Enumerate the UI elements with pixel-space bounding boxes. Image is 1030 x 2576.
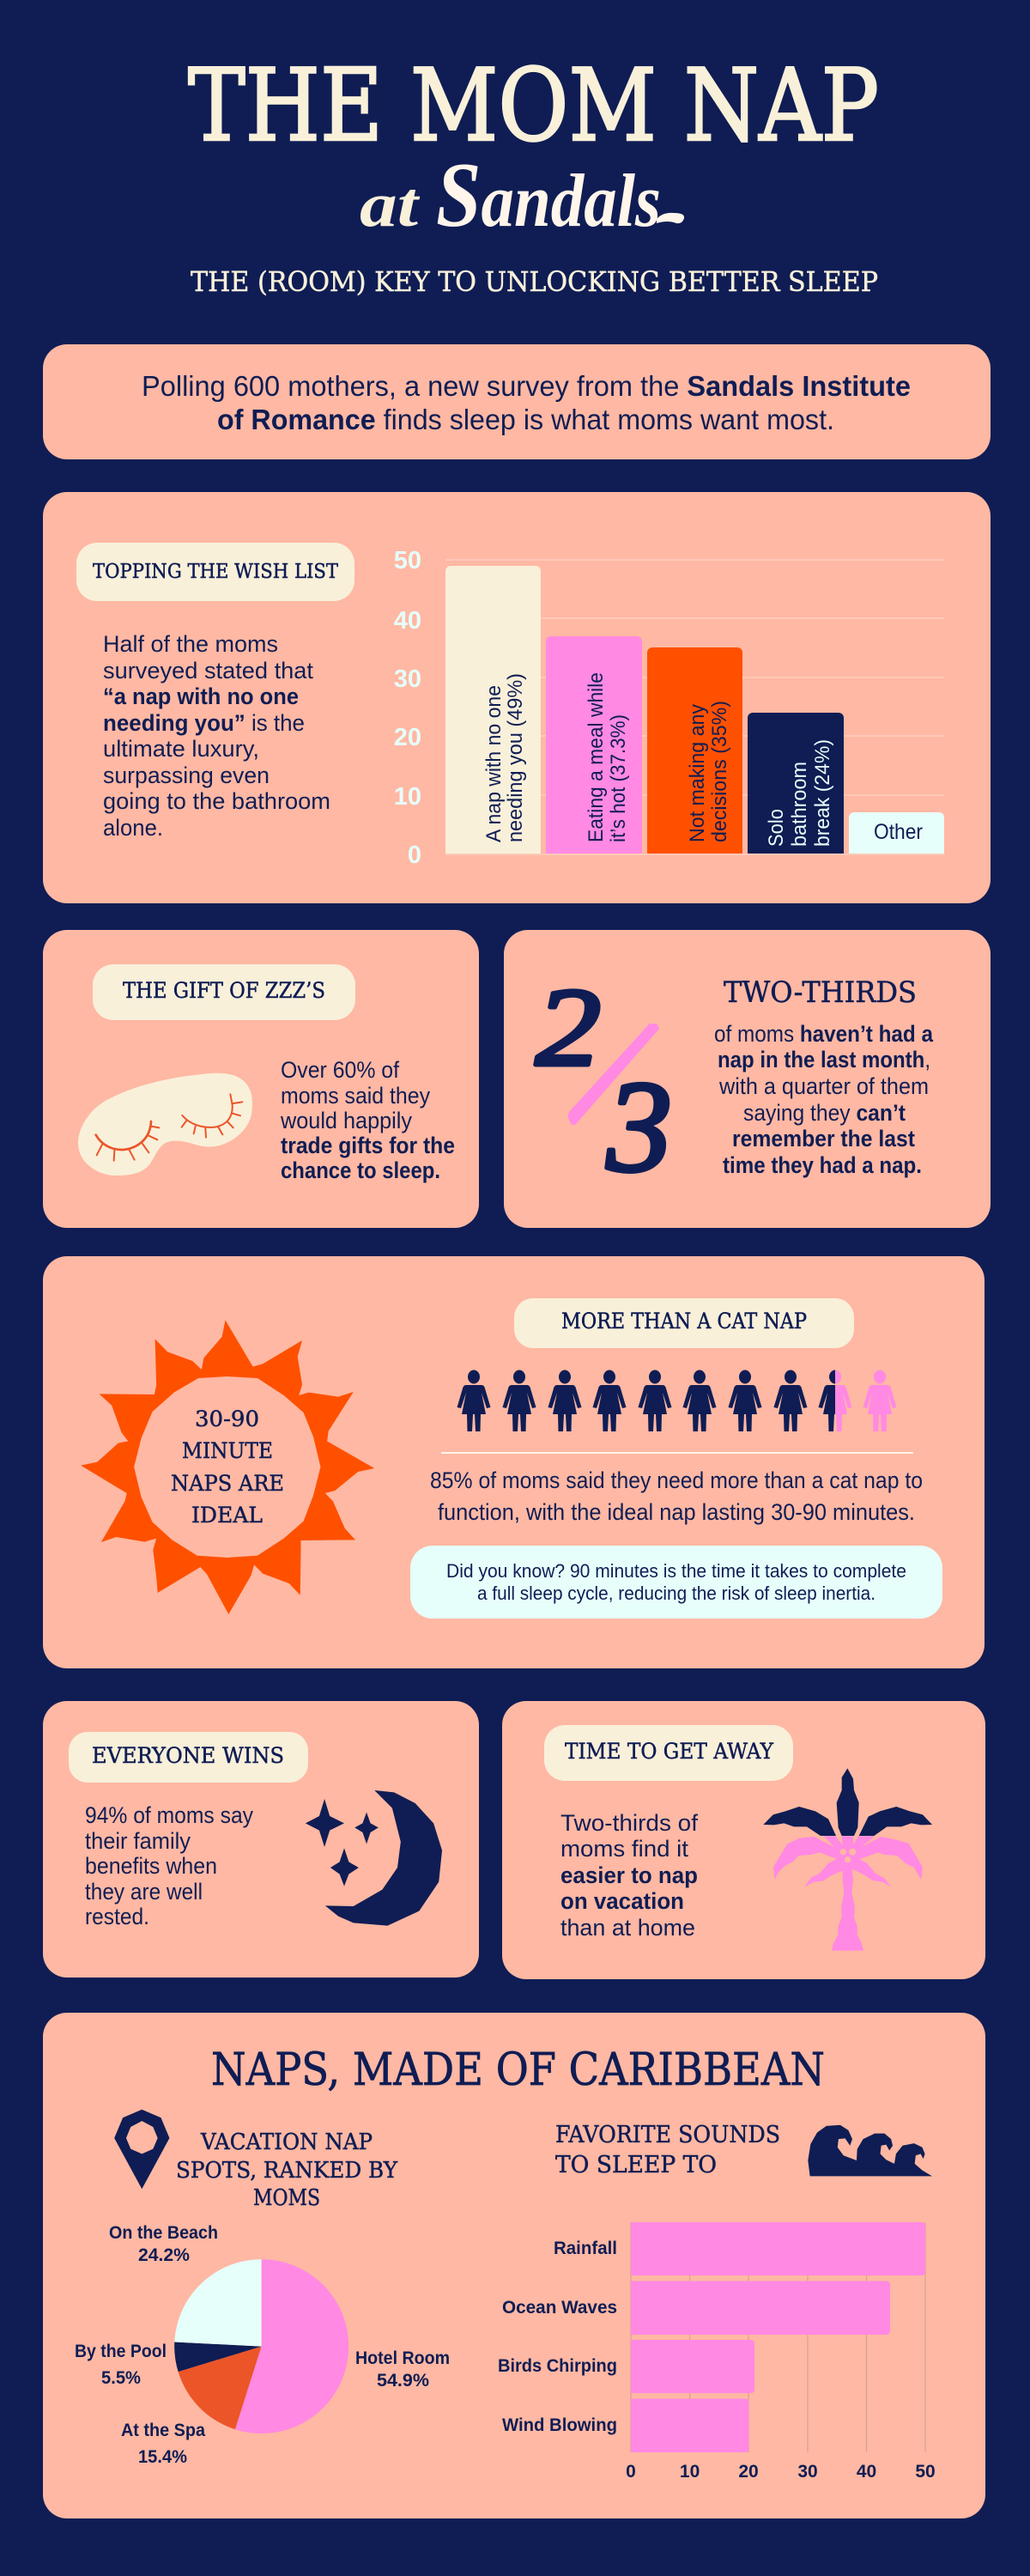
- pie chart: nap spots: By the Pool: [75, 2342, 167, 2361]
- everyone wins paragraph: benefits when: [85, 1853, 217, 1879]
- bar chart: wish list: 0: [408, 841, 421, 869]
- bar chart: favorite sounds: Ocean Waves: [502, 2298, 617, 2318]
- bar chart: favorite sounds: 20: [738, 2462, 759, 2482]
- pie chart: nap spots: On the Beach: [109, 2223, 218, 2243]
- two-thirds paragraph: with a quarter of them: [718, 1073, 929, 1099]
- title script: at Sandals: Sandals: [436, 144, 661, 246]
- intro text: of Romance finds sleep is what moms want most.: [217, 404, 834, 435]
- heading pill: the gift of zzz's: THE GIFT OF ZZZ’S: [123, 978, 325, 1003]
- subheading: favorite sounds: FAVORITE SOUNDS: [555, 2122, 780, 2148]
- two-thirds paragraph: saying they can’t: [743, 1100, 906, 1126]
- wish list paragraph: alone.: [103, 815, 163, 841]
- panel: the gift of zzz's: [43, 930, 479, 1228]
- bar chart: wish list: 50: [394, 547, 421, 574]
- heading: naps, made of caribbean: NAPS, MADE OF CARIBBEAN: [211, 2044, 825, 2096]
- icon: sun badge: [81, 1320, 374, 1614]
- gift paragraph: moms said they: [281, 1083, 430, 1109]
- pie chart: nap spots: 24.2%: [138, 2245, 190, 2265]
- bar chart: wish list: needing you (49%): [504, 673, 527, 842]
- panel: everyone wins: [43, 1701, 479, 1978]
- panel: more than a cat nap: [43, 1256, 985, 1668]
- wish list paragraph: going to the bathroom: [103, 788, 330, 814]
- heading pill: more than a cat nap: MORE THAN A CAT NAP: [561, 1309, 807, 1334]
- bar chart: wish list: 20: [394, 724, 421, 751]
- bar chart: wish list: it’s hot (37.3%): [607, 714, 630, 842]
- get away paragraph: easier to nap: [560, 1862, 698, 1888]
- heading pill: topping the wish list: TOPPING THE WISH LIST: [93, 561, 339, 583]
- subtitle: THE (ROOM) KEY TO UNLOCKING BETTER SLEEP: [191, 265, 878, 298]
- everyone wins paragraph: [85, 1802, 253, 1929]
- subheading: vacation nap spots: MOMS: [253, 2185, 320, 2211]
- callout: did you know: Did you know? 90 minutes is the time it takes to complete: [446, 1560, 906, 1582]
- bar chart: favorite sounds: [498, 2222, 936, 2482]
- pie chart: nap spots: 5.5%: [101, 2368, 141, 2388]
- icon: sun badge: 30-90: [195, 1406, 259, 1431]
- intro text: [142, 370, 911, 435]
- everyone wins paragraph: they are well: [85, 1879, 203, 1905]
- icon: moon and stars: [306, 1790, 442, 1926]
- title script: at Sandals: at: [360, 170, 421, 240]
- wish list paragraph: surveyed stated that: [103, 658, 313, 683]
- cat nap paragraph: function, with the ideal nap lasting 30-90 minutes.: [438, 1499, 915, 1525]
- two-thirds paragraph: of moms haven’t had a: [714, 1021, 934, 1047]
- title: THE MOM NAP: [188, 48, 879, 164]
- pie chart: nap spots: 15.4%: [138, 2447, 187, 2467]
- wish list paragraph: surpassing even: [103, 762, 270, 788]
- bar chart: wish list: Solo: [765, 809, 788, 847]
- panel: intro: [43, 344, 991, 459]
- icon: palm tree: [763, 1768, 932, 1951]
- get away paragraph: Two-thirds of: [560, 1810, 699, 1836]
- two-thirds paragraph: nap in the last month,: [718, 1047, 930, 1072]
- bar chart: wish list: break (24%): [811, 739, 834, 847]
- panel: time to get away: [502, 1701, 985, 1979]
- bar chart: favorite sounds: Birds Chirping: [498, 2356, 617, 2376]
- bar chart: favorite sounds: 30: [797, 2462, 818, 2482]
- subheading: vacation nap spots: SPOTS, RANKED BY: [176, 2158, 398, 2184]
- bar chart: wish list: Other: [874, 820, 923, 844]
- callout: did you know: [410, 1546, 942, 1619]
- two-thirds paragraph: [714, 1021, 934, 1178]
- bar chart: wish list: 10: [394, 783, 421, 811]
- bar chart: wish list: Not making any: [686, 704, 709, 842]
- bar chart: favorite sounds: Wind Blowing: [502, 2415, 617, 2435]
- pie chart: nap spots: 54.9%: [377, 2371, 429, 2391]
- fraction graphic: 2/3: [536, 966, 672, 1199]
- bar chart: wish list: [394, 547, 944, 869]
- cat nap paragraph: 85% of moms said they need more than a cat nap to: [430, 1467, 923, 1493]
- everyone wins paragraph: 94% of moms say: [85, 1802, 253, 1828]
- get away paragraph: on vacation: [560, 1888, 684, 1914]
- icon: sleep mask: [78, 1073, 252, 1176]
- panel: two-thirds: [504, 930, 991, 1228]
- subheading: favorite sounds: [555, 2122, 780, 2178]
- pictogram: 85 percent of moms: [457, 1370, 896, 1431]
- get away paragraph: than at home: [560, 1915, 695, 1941]
- bar chart: wish list: 40: [394, 607, 421, 635]
- fraction graphic: 2/3: 2: [536, 966, 601, 1090]
- get away paragraph: [560, 1810, 699, 1941]
- pie chart: nap spots: Hotel Room: [355, 2348, 450, 2368]
- gift paragraph: trade gifts for the: [281, 1133, 455, 1158]
- get away paragraph: moms find it: [560, 1836, 688, 1862]
- cat nap paragraph: [430, 1467, 923, 1525]
- wish list paragraph: Half of the moms: [103, 631, 278, 657]
- bar chart: wish list: decisions (35%): [708, 701, 731, 842]
- intro text: Polling 600 mothers, a new survey from the Sandals Institute: [142, 370, 911, 402]
- everyone wins paragraph: their family: [85, 1828, 191, 1854]
- heading pill: time to get away: [544, 1725, 793, 1781]
- icon: waves: [808, 2125, 932, 2176]
- wish list paragraph: “a nap with no one: [103, 683, 299, 709]
- bar chart: wish list: 30: [394, 665, 421, 693]
- pie chart: nap spots: [75, 2223, 450, 2467]
- wish list paragraph: [103, 631, 330, 841]
- bar chart: favorite sounds: 10: [680, 2462, 700, 2482]
- bar chart: wish list: Eating a meal while: [585, 672, 608, 842]
- heading pill: everyone wins: [69, 1732, 308, 1783]
- gift paragraph: chance to sleep.: [281, 1157, 440, 1183]
- bar chart: favorite sounds: 40: [857, 2462, 876, 2482]
- panel: topping the wish list: [43, 492, 991, 903]
- heading pill: everyone wins: EVERYONE WINS: [92, 1743, 284, 1768]
- bar chart: favorite sounds: 0: [626, 2462, 636, 2482]
- icon: sun badge: MINUTE: [182, 1438, 273, 1463]
- bar chart: favorite sounds: 50: [915, 2462, 936, 2482]
- subheading: vacation nap spots: [176, 2129, 398, 2211]
- heading pill: topping the wish list: [76, 543, 354, 601]
- gift paragraph: Over 60% of: [281, 1057, 399, 1083]
- bar chart: wish list: bathroom: [788, 762, 811, 847]
- callout: did you know: a full sleep cycle, reducing the risk of sleep inertia.: [477, 1583, 876, 1604]
- gift paragraph: would happily: [280, 1108, 412, 1133]
- heading pill: the gift of zzz's: [93, 964, 355, 1020]
- icon: sun badge: NAPS ARE: [171, 1471, 284, 1496]
- icon: map pin: [114, 2110, 169, 2189]
- wish list paragraph: needing you” is the: [103, 710, 305, 736]
- icon: sun badge: IDEAL: [191, 1503, 263, 1528]
- heading pill: more than a cat nap: [514, 1298, 854, 1348]
- wish list paragraph: ultimate luxury,: [103, 736, 259, 762]
- heading: two-thirds: TWO-THIRDS: [724, 975, 917, 1010]
- subheading: favorite sounds: TO SLEEP TO: [555, 2152, 717, 2178]
- panel: naps, made of caribbean: [43, 2013, 985, 2518]
- subheading: vacation nap spots: VACATION NAP: [200, 2129, 373, 2155]
- bar chart: wish list: A nap with no one: [482, 685, 506, 842]
- pie chart: nap spots: At the Spa: [121, 2421, 205, 2440]
- fraction graphic: 2/3: 3: [606, 1054, 672, 1199]
- two-thirds paragraph: remember the last: [732, 1126, 915, 1151]
- everyone wins paragraph: rested.: [85, 1904, 149, 1929]
- two-thirds paragraph: time they had a nap.: [723, 1152, 922, 1178]
- bar chart: favorite sounds: Rainfall: [554, 2239, 617, 2258]
- heading pill: time to get away: TIME TO GET AWAY: [565, 1739, 773, 1764]
- gift paragraph: [280, 1057, 455, 1183]
